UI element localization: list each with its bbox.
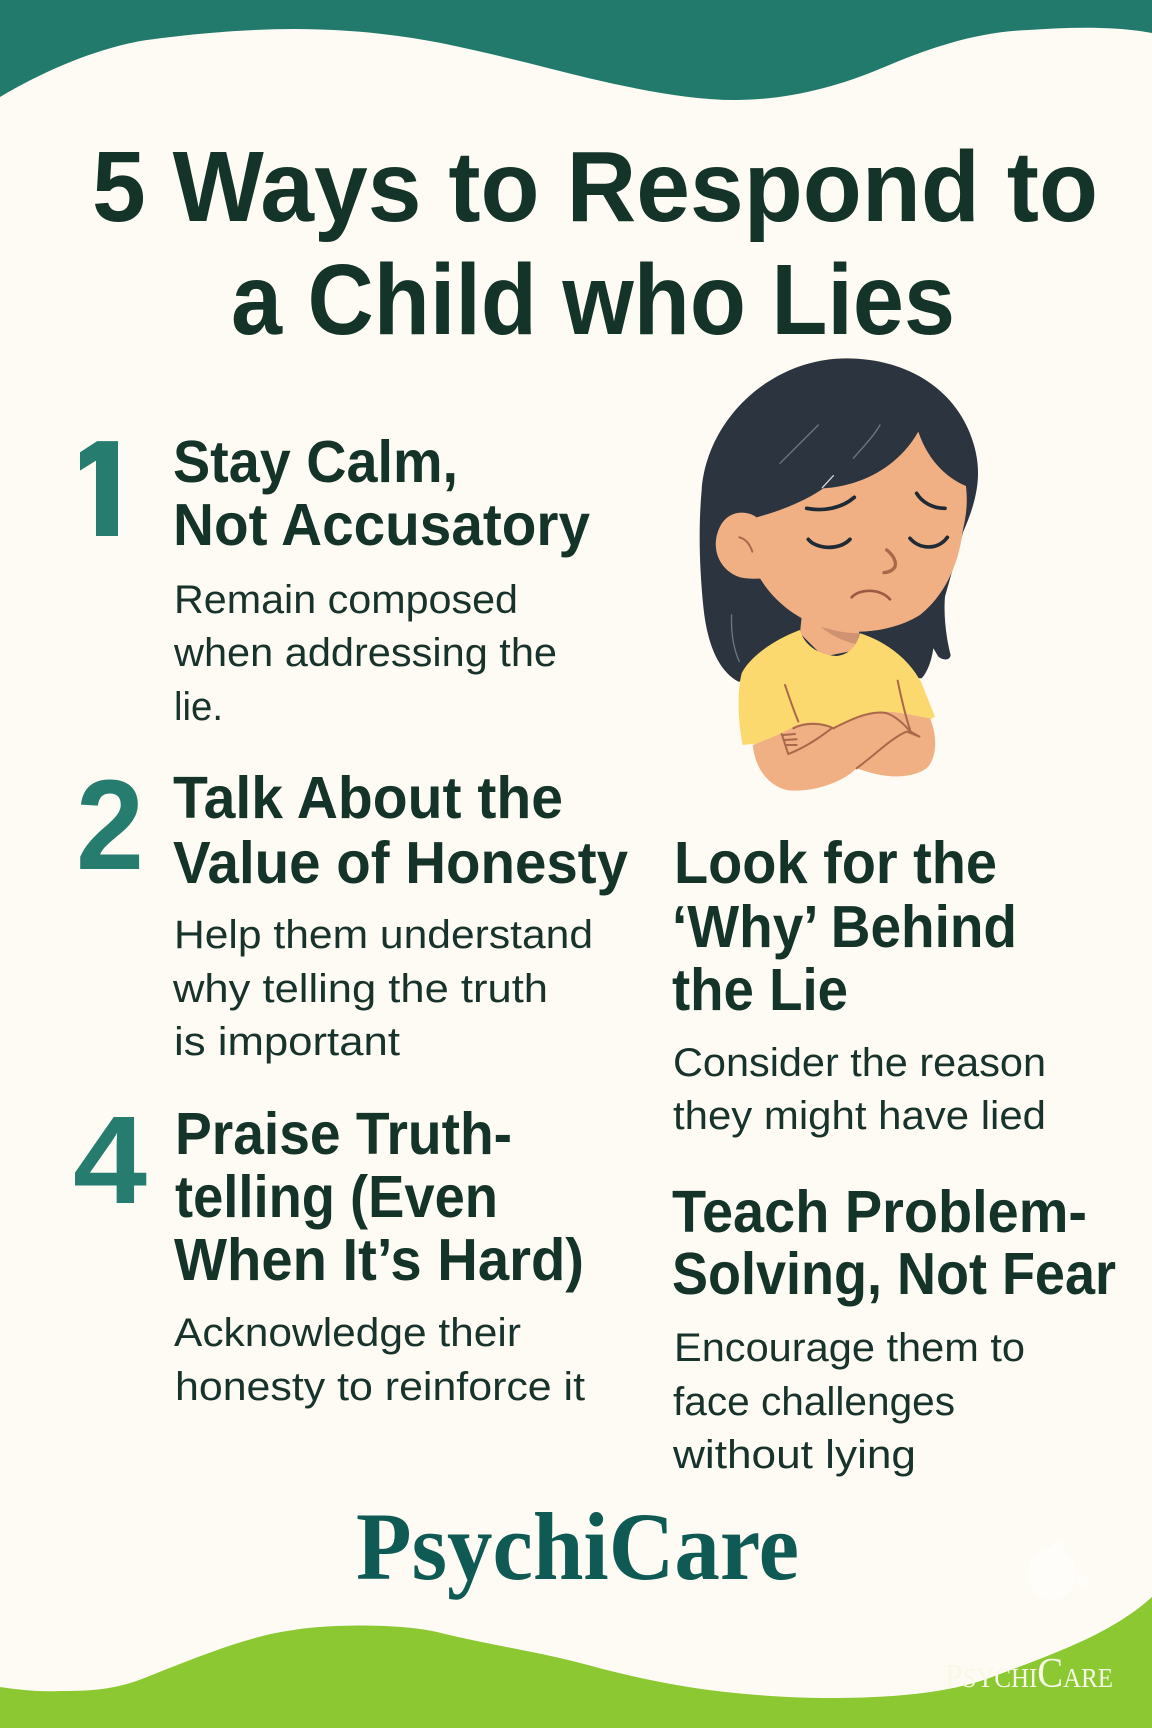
face [756, 432, 967, 632]
body text: step 2: is important [174, 1020, 400, 1064]
body text: step 1 [173, 578, 557, 729]
heading: praise truth-telling: Praise Truth- [175, 1101, 512, 1167]
body text: teach problem-solving: face challenges [673, 1380, 955, 1424]
body text: look for the why: Consider the reason [673, 1041, 1046, 1085]
body text: teach problem-solving [672, 1326, 1025, 1477]
body text: step 4: Acknowledge their [174, 1311, 521, 1355]
number 4: 4 [73, 1091, 147, 1230]
body text: step 1: Remain composed [174, 578, 518, 622]
title: a Child who Lies [231, 244, 955, 356]
number 2: 2 [76, 754, 144, 897]
shirt [739, 630, 935, 745]
body text: step 4 [174, 1311, 585, 1409]
arms [753, 712, 935, 791]
heading: praise truth-telling [174, 1101, 584, 1293]
skin and sleeve lines [739, 537, 919, 768]
heading: stay calm [173, 429, 590, 558]
heading: praise truth-telling: When It’s Hard) [174, 1227, 584, 1293]
heading: look for the why: Look for the [674, 830, 997, 896]
faint watermark emblem [1028, 1541, 1088, 1600]
number 1: 1 [57, 406, 150, 592]
panel: step 2 value of honesty [76, 754, 628, 1064]
body text: teach problem-solving: Encourage them to [674, 1326, 1025, 1370]
top teal wave [0, 0, 1152, 100]
illustration: sad girl with crossed arms [700, 358, 978, 791]
body text: look for the why [673, 1041, 1046, 1138]
eyes and brows [807, 493, 947, 547]
heading: look for the why: the Lie [672, 957, 848, 1023]
ear [716, 513, 762, 579]
neck [800, 617, 860, 657]
body text: look for the why: they might have lied [673, 1094, 1046, 1138]
heading: teach problem-solving: Solving, Not Fear [672, 1241, 1116, 1307]
heading: teach problem-solving [672, 1179, 1116, 1307]
heading: stay calm: Stay Calm, [173, 429, 458, 495]
body text: teach problem-solving: without lying [672, 1433, 916, 1477]
bottom green wave [0, 1597, 1152, 1728]
title: 5 Ways to Respond to [92, 131, 1098, 243]
mouth [852, 591, 890, 599]
heading: stay calm: Not Accusatory [173, 492, 590, 558]
heading: look for the why [672, 830, 1017, 1023]
heading: value of honesty: Value of Honesty [173, 830, 628, 896]
body text: step 1: when addressing the [173, 631, 557, 675]
hair [700, 358, 978, 682]
panel: teach problem-solving [672, 1179, 1116, 1477]
panel: look for the why [672, 830, 1046, 1138]
heading: value of honesty: Talk About the [173, 765, 563, 831]
nose [884, 550, 895, 573]
body text: step 2: Help them understand [174, 913, 593, 957]
logo: PsychiCare: PsychiCare [356, 1493, 799, 1600]
watermark: PsychiCare: PSYCHICARE [945, 1651, 1113, 1697]
body text: step 4: honesty to reinforce it [175, 1365, 585, 1409]
hair highlights [731, 425, 880, 662]
body text: step 2 [172, 913, 593, 1064]
panel: step 1 stay calm [80, 439, 590, 720]
title [92, 131, 1098, 356]
heading: look for the why: ‘Why’ Behind [672, 894, 1017, 960]
heading: teach problem-solving: Teach Problem- [672, 1179, 1087, 1245]
body text: step 2: why telling the truth [172, 967, 548, 1011]
body text: step 1: lie. [174, 685, 223, 729]
heading: praise truth-telling: telling (Even [175, 1164, 498, 1230]
panel: step 4 praise truth-telling [73, 1091, 585, 1409]
heading: value of honesty [173, 765, 628, 896]
